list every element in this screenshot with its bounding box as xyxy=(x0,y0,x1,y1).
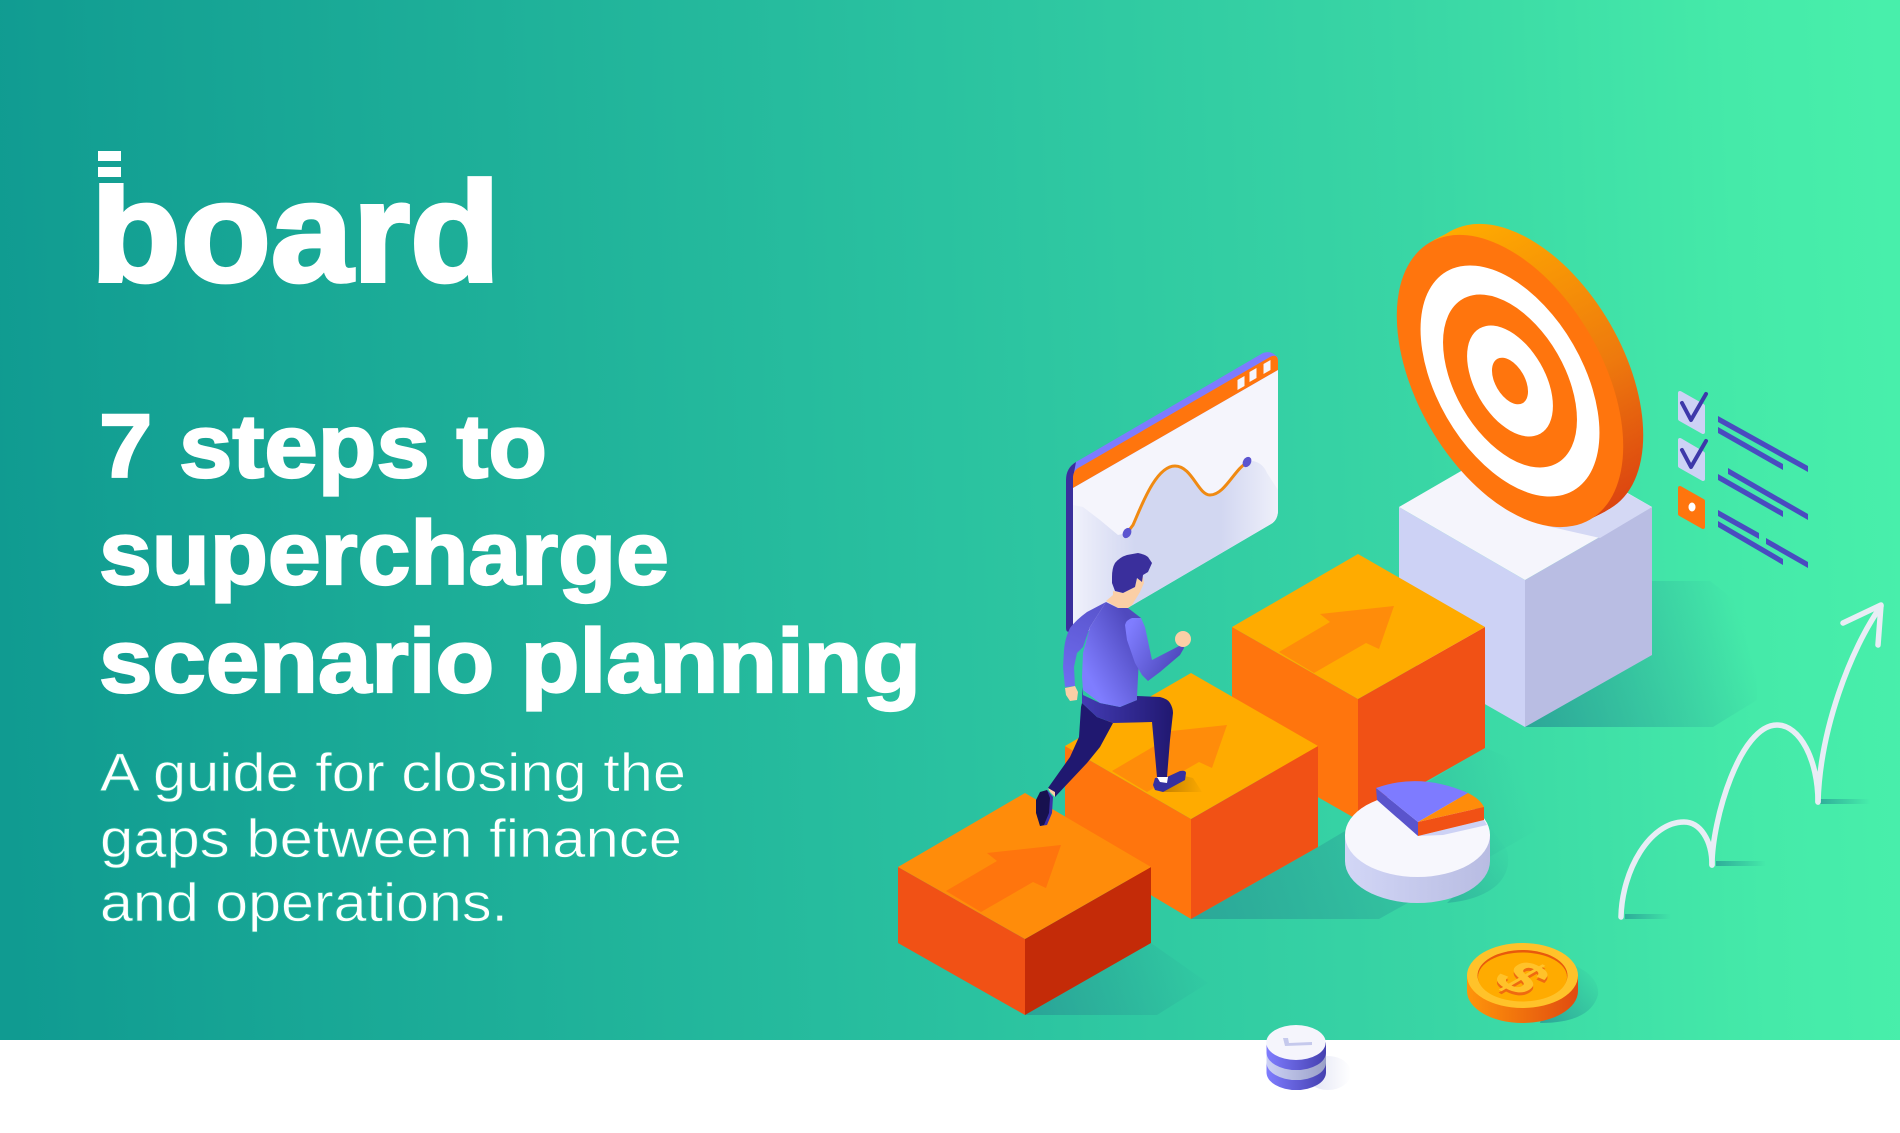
title: 7 steps to xyxy=(99,397,547,497)
subtitle: A guide for closing the xyxy=(100,743,686,803)
icon: coin stack xyxy=(1266,1025,1351,1090)
person climbing the steps xyxy=(1036,553,1202,826)
browser window with line chart xyxy=(1066,352,1278,640)
icon: dollar coin xyxy=(1467,943,1598,1023)
subtitle: and operations. xyxy=(100,873,508,933)
arrow: bouncing growth arrow xyxy=(1621,605,1881,919)
subtitle xyxy=(100,743,686,933)
shadows cast by the steps and the cube xyxy=(1025,581,1757,1015)
title: supercharge xyxy=(99,504,669,604)
icon: checklist xyxy=(1680,393,1808,568)
icon: target xyxy=(1350,185,1690,566)
step 2 box with arrow xyxy=(1065,673,1318,919)
step 3 box with arrow xyxy=(1232,554,1485,820)
icon: dollar coin: $ xyxy=(1477,955,1567,1007)
title xyxy=(99,397,921,712)
cube pedestal xyxy=(1399,434,1652,727)
logo: board: board xyxy=(91,153,500,312)
subtitle: gaps between finance xyxy=(100,809,682,869)
icon: dollar coin: $ xyxy=(1477,952,1567,1004)
step 1 box with arrow xyxy=(898,793,1151,1015)
icon: pie chart xyxy=(1345,781,1508,903)
title: scenario planning xyxy=(99,612,921,712)
